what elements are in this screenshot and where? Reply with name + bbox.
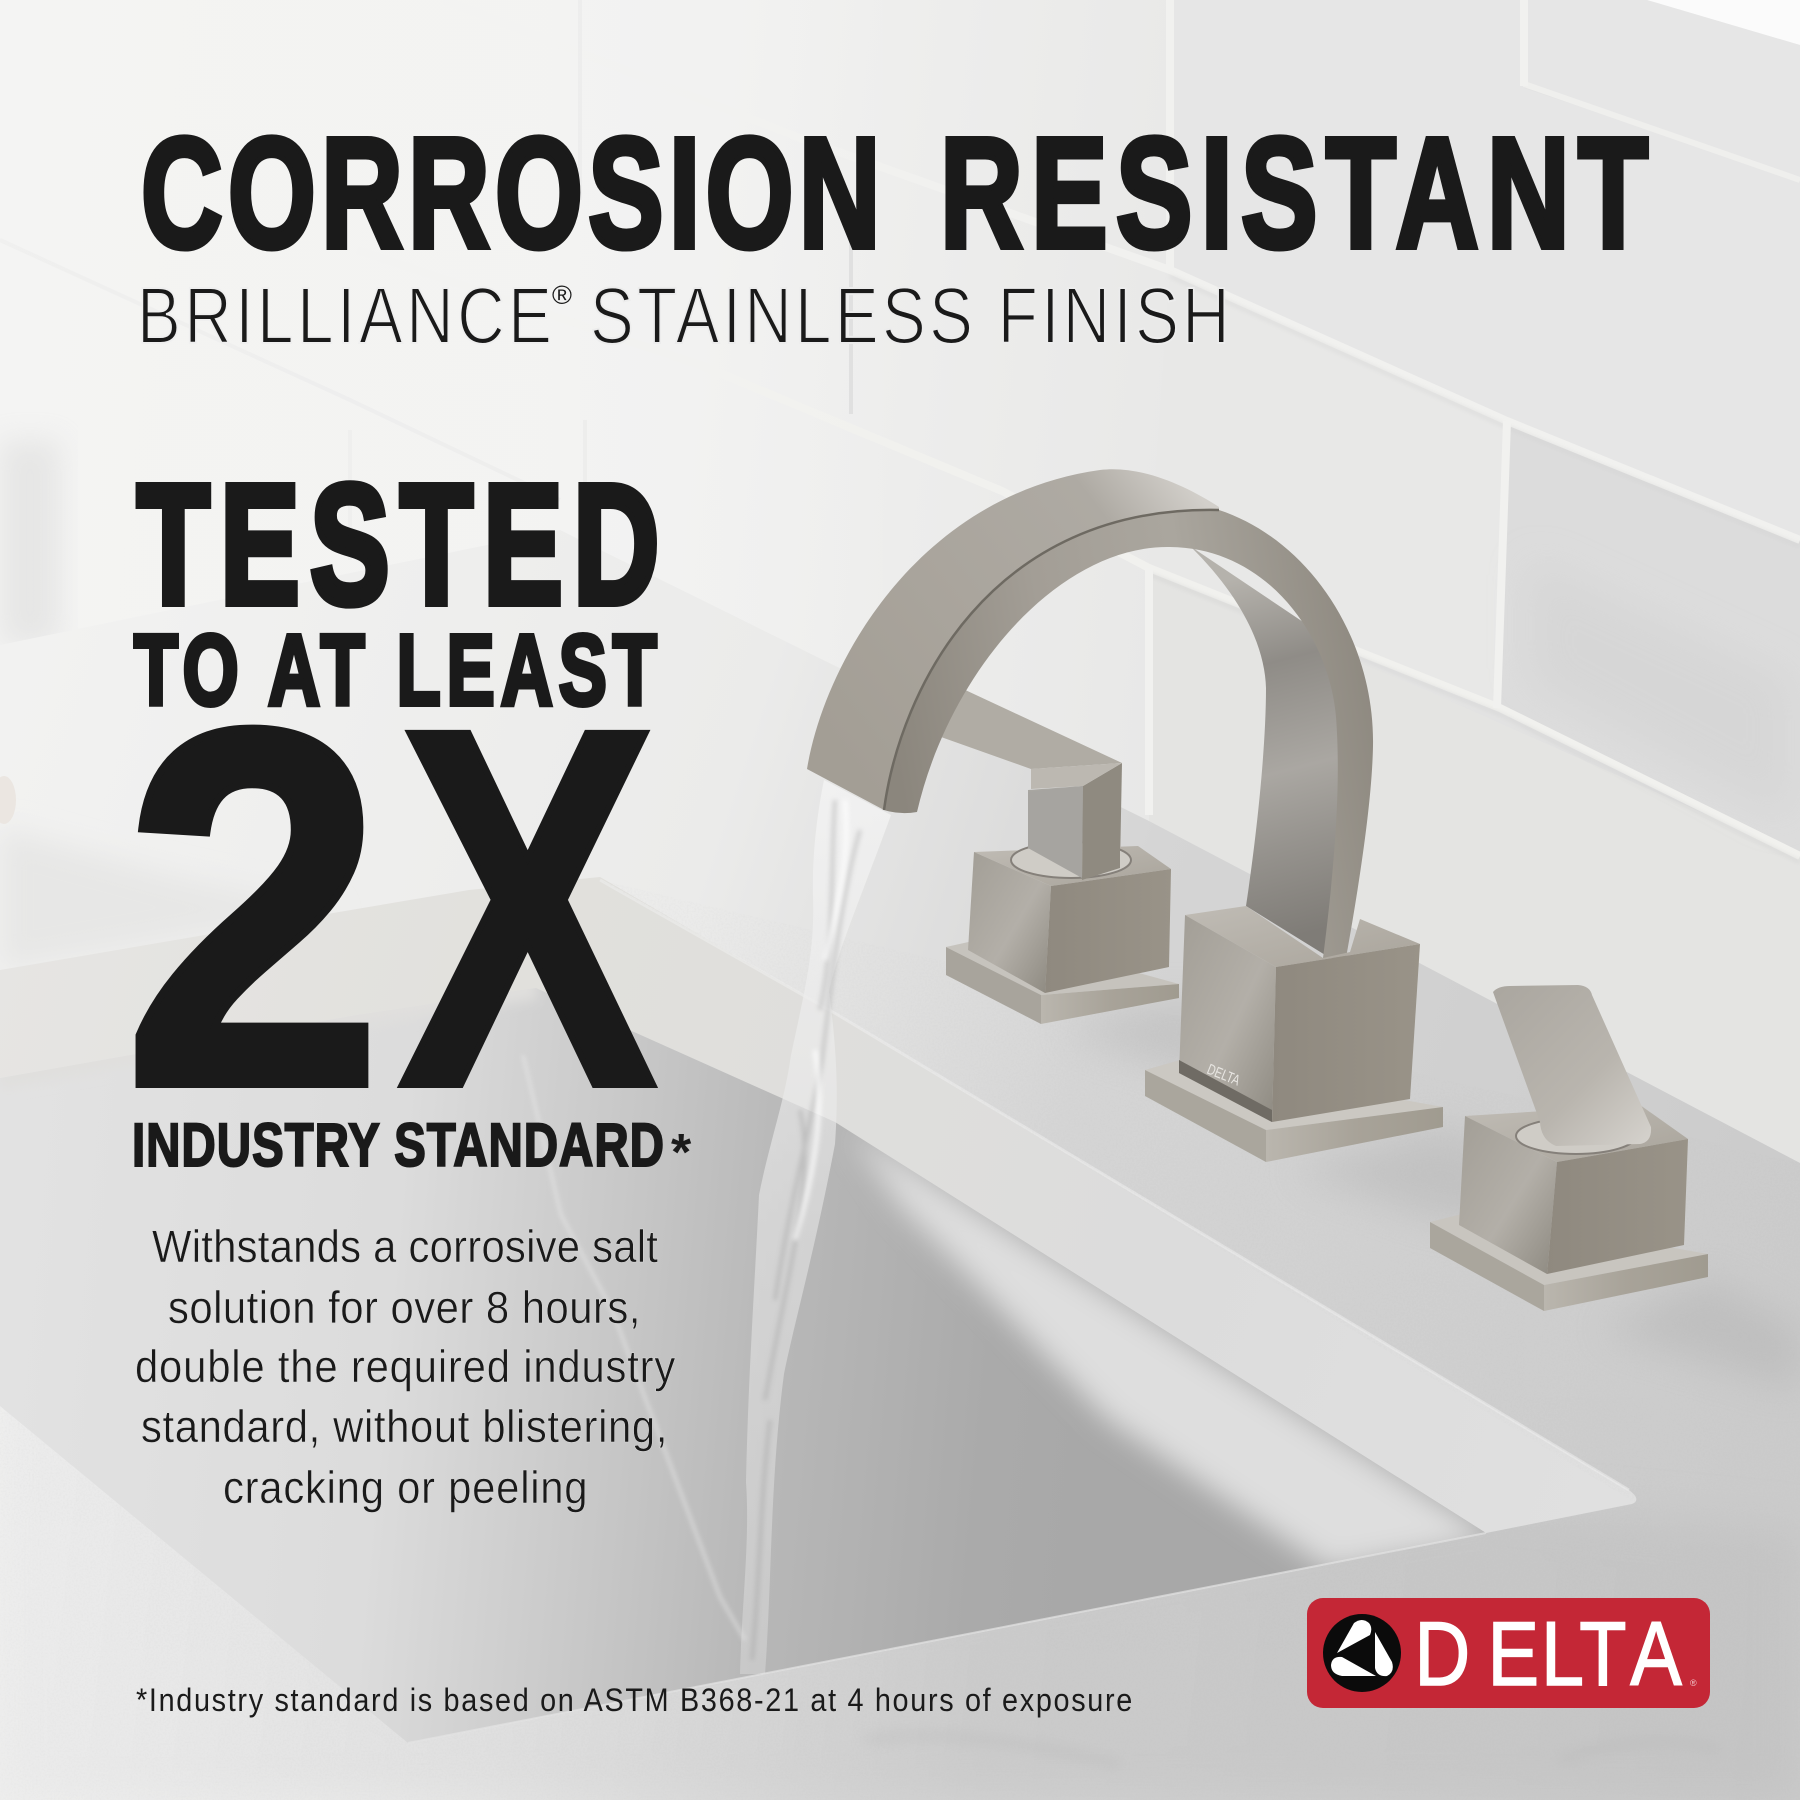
headline: industry standard: INDUSTRY STANDARD <box>132 1110 664 1179</box>
subtitle: BRILLIANCE <box>137 271 552 360</box>
icon: water stream <box>740 780 891 1674</box>
headline: industry standard: * <box>671 1124 692 1182</box>
logo: Delta: ® <box>1690 1678 1697 1688</box>
body text <box>135 1223 676 1513</box>
center base block <box>1145 906 1443 1162</box>
spout front band <box>884 510 1373 958</box>
subtitle: STAINLESS FINISH <box>590 271 1230 360</box>
headline: 2X <box>123 623 658 1192</box>
sink basin <box>0 877 1636 1743</box>
title: CORROSION <box>141 105 880 280</box>
body text: solution for over 8 hours, <box>168 1284 640 1333</box>
left handle block <box>946 766 1179 1024</box>
stone texture <box>0 880 1800 1800</box>
spout top face <box>807 469 1219 810</box>
right handle lever <box>1493 985 1651 1146</box>
body text: cracking or peeling <box>223 1464 588 1513</box>
logo: Delta: DELTA <box>1414 1603 1683 1704</box>
body text: standard, without blistering, <box>141 1403 667 1452</box>
headline: 2X: X <box>399 623 658 1192</box>
left handle lever <box>941 688 1122 878</box>
subtitle <box>137 271 1230 360</box>
headline: to at least: TO AT LEAST <box>134 615 657 726</box>
title <box>141 105 1648 281</box>
countertop <box>0 530 1800 1800</box>
footnote: *Industry standard is based on ASTM B368-21 at 4 hours of exposure <box>136 1683 1132 1718</box>
background: tiled wall <box>0 0 1800 862</box>
logo: Delta <box>1307 1598 1710 1708</box>
counter shadows <box>1060 998 1800 1390</box>
spout inner brushed face <box>1190 546 1342 958</box>
right handle block <box>1430 985 1708 1311</box>
body text: double the required industry <box>135 1343 676 1392</box>
icon: faucet <box>807 469 1708 1311</box>
headline: tested: TESTED <box>137 450 659 640</box>
subtitle: ® <box>552 280 572 310</box>
headline: 2X: 2 <box>123 623 383 1192</box>
title: RESISTANT <box>940 107 1648 281</box>
body text: Withstands a corrosive salt <box>152 1223 658 1272</box>
logo mark on faucet: DELTA <box>1205 1061 1242 1089</box>
